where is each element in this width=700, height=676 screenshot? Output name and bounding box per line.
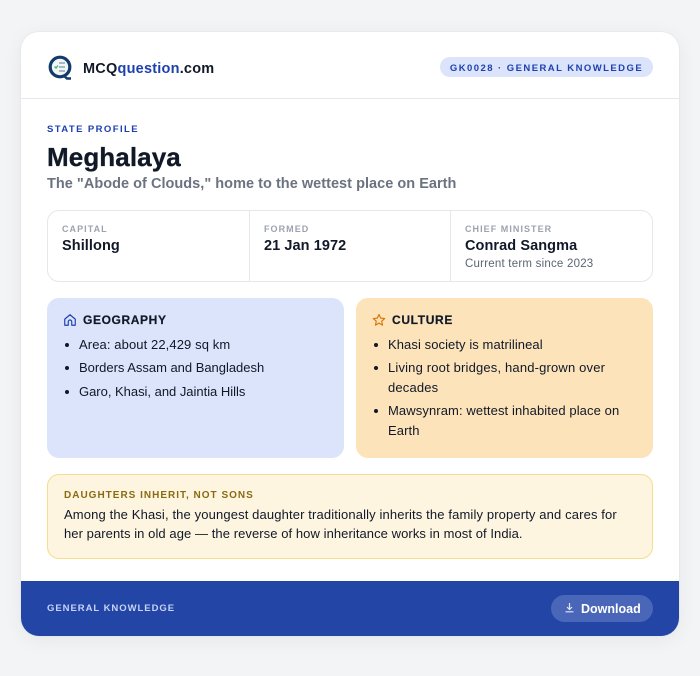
culture list: Earth xyxy=(388,423,420,438)
fact: formed xyxy=(250,211,451,281)
callout text: her parents in old age — the reverse of how inheritance works in most of India. xyxy=(64,526,523,541)
icon: star xyxy=(372,314,386,326)
code badge xyxy=(440,57,653,77)
culture list: Mawsynram: wettest inhabited place on xyxy=(388,403,619,418)
download button xyxy=(551,595,653,622)
culture heading: CULTURE xyxy=(392,313,453,327)
header xyxy=(21,32,679,99)
download label: Download xyxy=(581,602,641,616)
fact: formed: FORMED xyxy=(264,224,309,234)
geography list xyxy=(65,337,264,399)
subtitle: The "Abode of Clouds," home to the wettest place on Earth xyxy=(47,176,456,192)
footer xyxy=(21,581,679,636)
geography heading: GEOGRAPHY xyxy=(83,313,167,327)
culture list: Khasi society is matrilineal xyxy=(388,337,543,352)
fact: chief minister xyxy=(465,224,593,270)
fact: chief minister: Current term since 2023 xyxy=(465,258,593,270)
fact: chief minister: Conrad Sangma xyxy=(465,238,577,254)
panel: geography xyxy=(47,298,344,458)
eyebrow: STATE PROFILE xyxy=(47,124,139,135)
callout text: Among the Khasi, the youngest daughter traditionally inherits the family property and cares for xyxy=(64,507,617,522)
facts panel xyxy=(47,210,653,282)
icon: house xyxy=(64,314,76,326)
culture list: Living root bridges, hand-grown over xyxy=(388,360,605,375)
title: Meghalaya xyxy=(47,142,181,172)
callout heading: DAUGHTERS INHERIT, NOT SONS xyxy=(64,490,254,501)
geography list: Garo, Khasi, and Jaintia Hills xyxy=(79,384,245,399)
logo icon xyxy=(48,56,72,80)
logo text: MCQquestion.com xyxy=(83,61,214,77)
footer label: GENERAL KNOWLEDGE xyxy=(47,603,175,614)
fact: capital: CAPITAL xyxy=(62,224,108,234)
geography list: Area: about 22,429 sq km xyxy=(79,337,230,352)
fact: chief minister: CHIEF MINISTER xyxy=(465,224,552,234)
fact: capital: Shillong xyxy=(62,238,120,254)
fact: formed: 21 Jan 1972 xyxy=(264,238,346,254)
callout text xyxy=(64,507,617,541)
fact: capital xyxy=(48,211,250,281)
geography list: Borders Assam and Bangladesh xyxy=(79,360,264,375)
panel: culture xyxy=(356,298,653,458)
culture list: decades xyxy=(388,380,438,395)
culture list xyxy=(374,337,619,438)
icon: download xyxy=(566,603,574,612)
callout xyxy=(47,474,653,559)
code badge: GK0028 · GENERAL KNOWLEDGE xyxy=(450,63,643,74)
